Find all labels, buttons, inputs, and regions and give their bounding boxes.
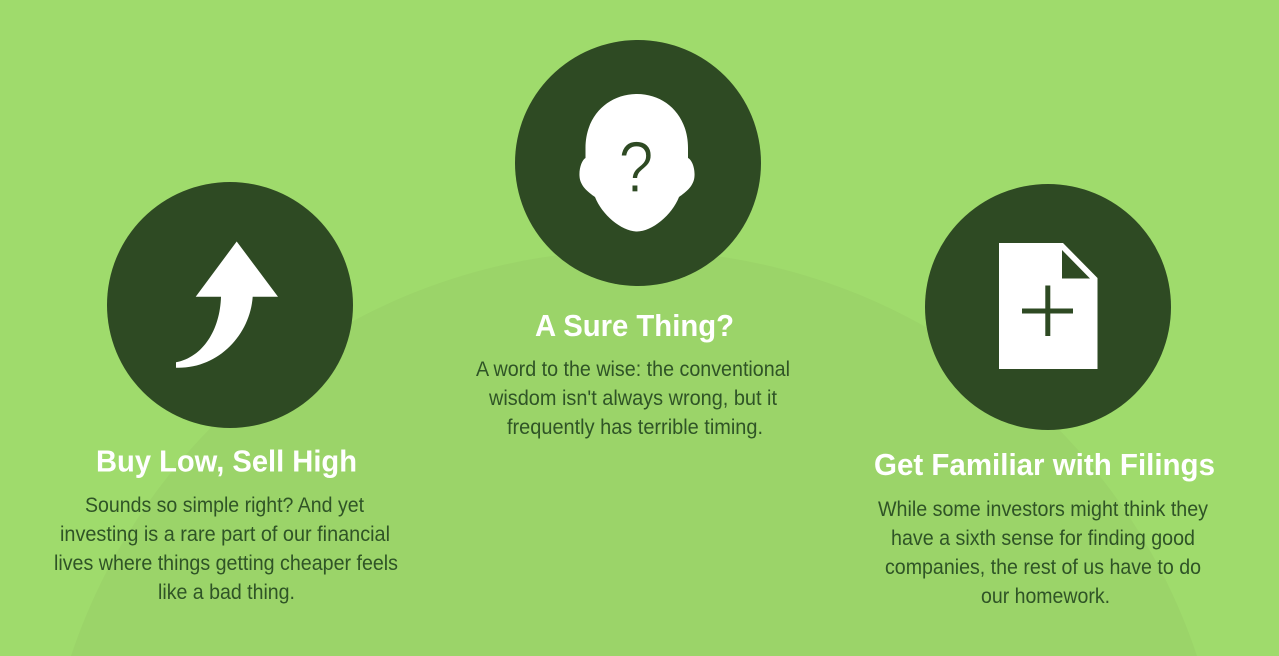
heading: Buy Low, Sell High bbox=[96, 444, 357, 478]
text block bbox=[476, 357, 790, 439]
text block: our homework. bbox=[981, 584, 1110, 608]
text block bbox=[54, 493, 398, 604]
text block: lives where things getting cheaper feels bbox=[54, 551, 398, 575]
text block: wisdom isn't always wrong, but it bbox=[488, 386, 777, 410]
icon: head with question mark: ? bbox=[618, 128, 654, 208]
heading: Get Familiar with Filings bbox=[874, 447, 1215, 482]
panel: a sure thing bbox=[476, 40, 790, 439]
background arc bbox=[71, 250, 1197, 656]
text block: like a bad thing. bbox=[158, 580, 295, 604]
text block: frequently has terrible timing. bbox=[507, 415, 763, 439]
icon: upward arrow bbox=[107, 182, 353, 428]
panel: buy low, sell high bbox=[54, 182, 398, 604]
text block bbox=[878, 497, 1208, 608]
icon: head with question mark bbox=[515, 40, 761, 286]
text block: While some investors might think they bbox=[878, 497, 1208, 521]
text block: A word to the wise: the conventional bbox=[476, 357, 790, 381]
panel: get familiar with filings bbox=[874, 184, 1215, 608]
icon: document with plus bbox=[925, 184, 1171, 430]
heading: A Sure Thing? bbox=[535, 308, 734, 343]
text block: investing is a rare part of our financial bbox=[60, 522, 390, 546]
text block: Sounds so simple right? And yet bbox=[85, 493, 364, 517]
text block: have a sixth sense for finding good bbox=[891, 526, 1195, 550]
text block: companies, the rest of us have to do bbox=[885, 555, 1201, 579]
